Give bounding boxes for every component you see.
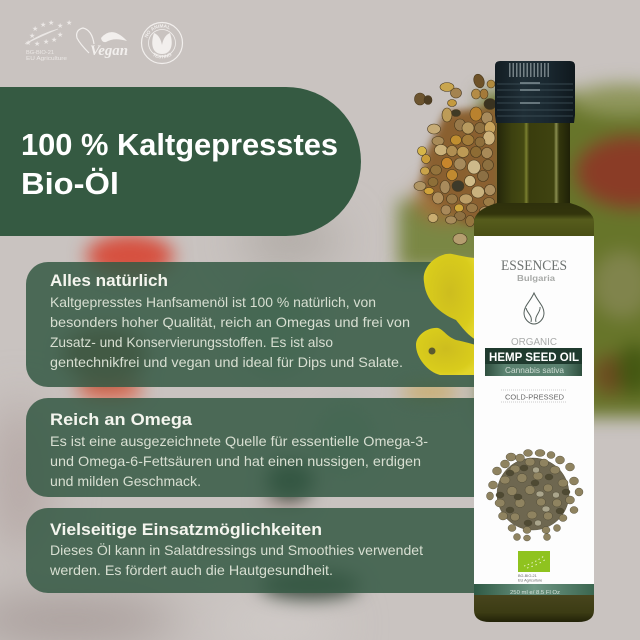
panel: Reich an Omega: Es ist eine ausgezeichnete Quelle für essentielle Omega-3- — [50, 433, 428, 449]
icon: EU organic label logo: BG-BIO-21 — [518, 574, 537, 578]
panel: Reich an Omega — [26, 398, 474, 497]
panel: Reich an Omega: und Omega-6-Fettsäuren und hat einen nussigen, erdigen — [50, 453, 421, 469]
bottle cap — [495, 61, 575, 123]
panel: Alles natürlich — [26, 262, 474, 387]
icon: EU organic leaf: ★ — [57, 31, 63, 39]
panel: Alles natürlich: Kaltgepresstes Hanfsamenöl ist 100 % natürlich, von — [50, 294, 376, 310]
panel: Reich an Omega: Reich an Omega — [50, 411, 193, 429]
panel: Reich an Omega: und milden Geschmack. — [50, 473, 201, 489]
icon: no animal testing — [141, 22, 183, 64]
cold pressed — [501, 390, 567, 402]
product band — [485, 348, 582, 376]
icon: EU organic leaf: ★ — [34, 40, 40, 48]
title line 2: Bio-Öl — [21, 166, 119, 201]
product band: Cannabis sativa — [505, 365, 564, 375]
icon: EU organic label logo — [518, 551, 550, 582]
icon: EU organic label logo: EU Agriculture — [518, 578, 542, 582]
icon: vegan: Vegan — [90, 43, 128, 59]
oil splash large — [424, 254, 476, 340]
oil splash small — [416, 328, 476, 375]
icon: EU organic leaf: ★ — [40, 21, 46, 29]
panel: Vielseitige Einsatzmöglichkeiten — [26, 508, 474, 593]
panel: Alles natürlich: besonders hoher Qualität, reich an Omegas und frei von — [50, 314, 410, 330]
icon: EU organic leaf: BG-BIO-21 — [26, 50, 54, 56]
icon: oil drop — [524, 293, 544, 324]
title: 100 % Kaltgepresstes — [21, 127, 338, 162]
icon: EU organic leaf: ★ — [43, 38, 49, 46]
seeds pile — [414, 73, 500, 244]
panel: Vielseitige Einsatzmöglichkeiten: Dieses Öl kann in Salatdressings und Smoothies verwendet — [50, 541, 423, 558]
bottle neck — [497, 120, 570, 210]
organic: ORGANIC — [511, 337, 557, 348]
icon: EU organic leaf: EU Agriculture — [26, 56, 67, 62]
icon: vegan — [77, 28, 128, 59]
panel: Alles natürlich: Alles natürlich — [50, 272, 168, 290]
bottle label — [474, 236, 594, 584]
icon: EU organic leaf: ★ — [57, 22, 63, 30]
brand: ESSENCES — [501, 258, 567, 274]
volume band — [474, 584, 594, 596]
bottle base glass — [474, 590, 594, 622]
icon: EU organic leaf: ★ — [51, 36, 57, 44]
icon: EU organic leaf: ★ — [25, 39, 31, 47]
cold pressed: COLD-PRESSED — [505, 392, 565, 402]
panel: Vielseitige Einsatzmöglichkeiten: Vielseitige Einsatzmöglichkeiten — [50, 521, 322, 539]
bottle — [474, 61, 594, 622]
header panel — [0, 87, 361, 236]
seed circle — [486, 450, 583, 541]
panel: Vielseitige Einsatzmöglichkeiten: werden. Es fördert auch die Hautgesundheit. — [49, 562, 333, 578]
bottle shoulder — [474, 203, 594, 240]
panel: Alles natürlich: gentechnikfrei und vegan und ideal für Dips und Salate. — [50, 354, 403, 370]
icon: no animal testing: TESTING — [154, 52, 172, 58]
product band: HEMP SEED OIL — [489, 350, 579, 364]
icon: EU organic leaf: ★ — [29, 32, 35, 40]
icon: EU organic leaf: ★ — [48, 19, 54, 27]
volume band: 250 ml e/ 8.5 Fl Oz — [510, 590, 560, 596]
icon: EU organic leaf — [25, 19, 72, 62]
icon: EU organic leaf: ★ — [32, 25, 38, 33]
icon: EU organic leaf: ★ — [66, 19, 72, 27]
icon: no animal testing: NO ANIMAL — [144, 24, 170, 38]
brand subline: Bulgaria — [517, 274, 556, 283]
panel: Alles natürlich: Zusatz- und Konservierungsstoffen. Es ist also — [50, 334, 333, 350]
